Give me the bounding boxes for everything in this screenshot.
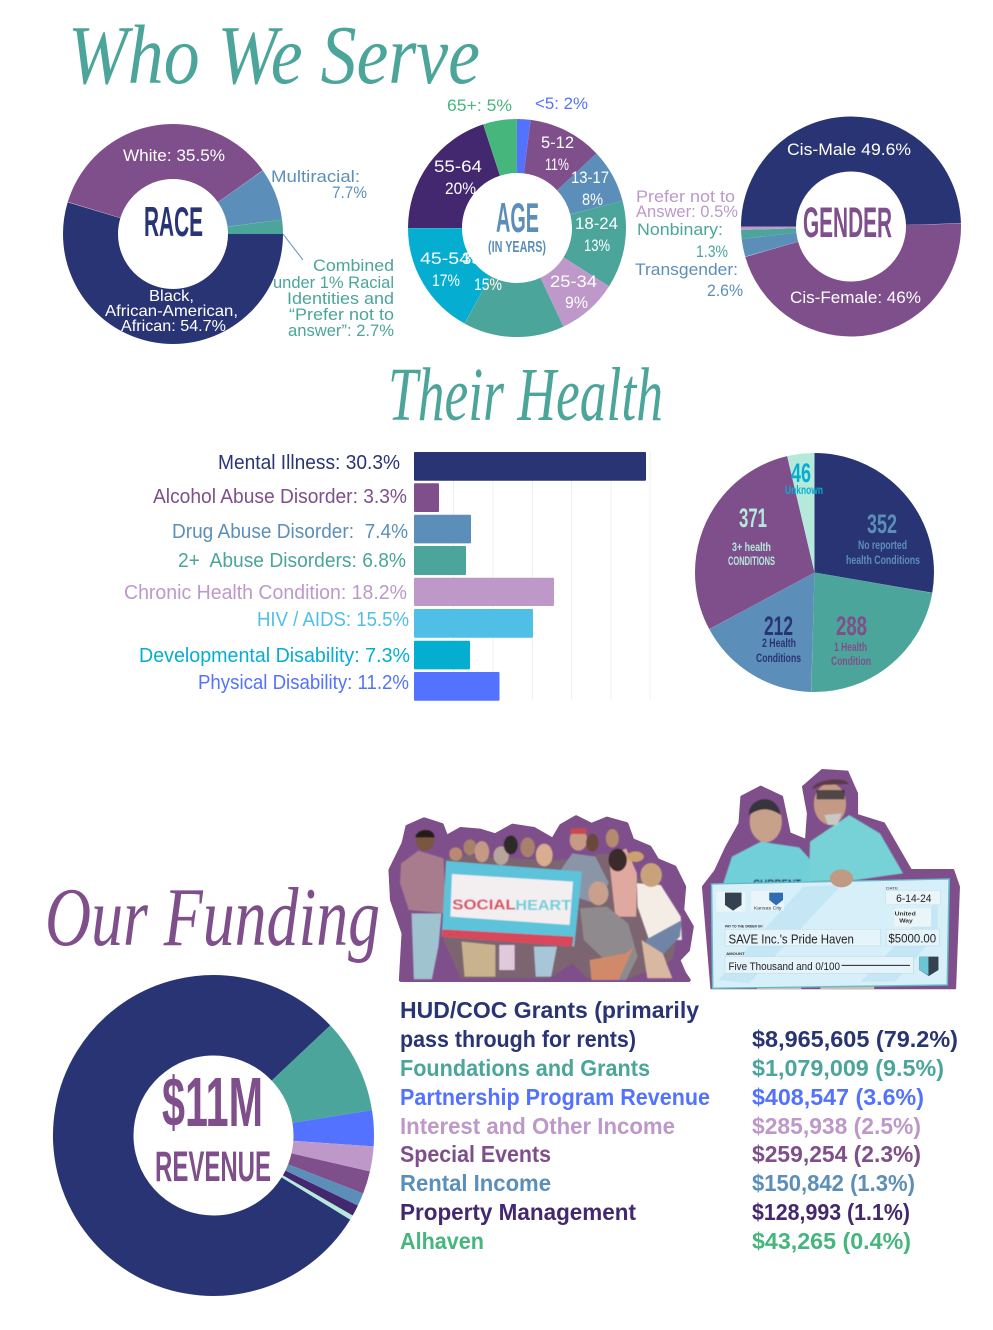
row: HUD/COC grants: [400, 997, 958, 1052]
gender outer labels: Prefer not to: [636, 187, 735, 206]
row: foundations and grants: [400, 1055, 944, 1081]
bar: HIV/AIDS: [414, 609, 533, 638]
pie label: 371: 3+ health: [732, 540, 771, 554]
age slice labels: 13%: [584, 236, 610, 255]
age slice labels: 35-44: [462, 249, 505, 268]
legs below check: [757, 983, 874, 989]
gender slice labels: [787, 140, 921, 307]
funding table: [400, 997, 958, 1254]
race label: black: Black,: [149, 288, 194, 305]
race label: combined: Identities and: [287, 289, 394, 308]
row: rental income: $150,842 (1.3%): [752, 1170, 915, 1196]
bar labels: Developmental Disability: 7.3%: [139, 645, 410, 667]
age outer labels: <5: 2%: [535, 94, 588, 113]
pie label: 212: 2 Health: [762, 636, 796, 650]
pie label: 212: Conditions: [756, 651, 801, 665]
photo: group with banner: [391, 817, 692, 980]
purple cutout backing: [391, 817, 692, 980]
people at right: [580, 863, 682, 980]
bar: physical disability: [414, 672, 500, 701]
age slice labels: 18-24: [575, 214, 618, 233]
check: Five Thousand and 0/100: [728, 960, 840, 973]
age slice labels: 45-54: [420, 249, 470, 268]
purple cutout backing: [703, 770, 959, 988]
check: [712, 879, 949, 988]
row: special events: Special Events: [400, 1141, 551, 1167]
age slice labels: 5-12: [541, 133, 574, 152]
row: property management: Property Management: [400, 1199, 636, 1225]
bar: alcohol abuse: [414, 483, 439, 512]
row: HUD/COC grants: pass through for rents): [400, 1026, 636, 1052]
bar: developmental disability: [414, 641, 470, 669]
right person's hand: [830, 869, 853, 887]
row: interest and other income: $285,938 (2.5%): [752, 1113, 921, 1139]
pie slices: [734, 492, 895, 653]
race label: multiracial: [271, 167, 367, 202]
row: partnership program revenue: $408,547 (3.6%): [752, 1084, 924, 1110]
pie label: 371: 371: [739, 503, 767, 533]
pie label: 212: [756, 611, 801, 665]
age slice labels: [420, 133, 618, 312]
row: foundations and grants: $1,079,009 (9.5%): [752, 1055, 944, 1081]
age slice labels: 8%: [582, 190, 603, 209]
legs: [462, 942, 557, 977]
check: Way: [899, 918, 913, 925]
check: DATE: [886, 886, 898, 891]
panel: race donut: RACE: [144, 198, 203, 245]
pie label: 46: [785, 458, 823, 497]
panel: race donut: [58, 119, 394, 349]
bar labels: Alcohol Abuse Disorder: 3.3%: [153, 486, 407, 508]
gender donut chart: [749, 125, 953, 328]
age center label: (IN YEARS): [488, 239, 546, 256]
photo subjects: [400, 828, 682, 980]
age slice labels: 11%: [545, 155, 569, 174]
bar labels: Drug Abuse Disorder: 7.4%: [172, 521, 408, 543]
age outer labels: [447, 94, 588, 115]
gender slice labels: Cis-Female: 46%: [790, 288, 921, 307]
banner: SOCIAL: [452, 897, 516, 913]
row: rental income: Rental Income: [400, 1170, 551, 1196]
bar labels: 2+ Abuse Disorders: 6.8%: [178, 550, 406, 572]
bar labels: Physical Disability: 11.2%: [198, 672, 409, 694]
gender outer labels: 1.3%: [696, 242, 728, 261]
panel: health conditions pie: [728, 458, 920, 668]
race label: combined: Combined: [313, 256, 394, 275]
panel: gender donut: GENDER: [803, 199, 892, 247]
row: HUD/COC grants: $8,965,605 (79.2%): [752, 1026, 958, 1052]
race label: multiracial: 7.7%: [332, 183, 367, 202]
banner: [442, 861, 582, 947]
pie label: 288: [831, 611, 871, 668]
banner: HEART: [515, 898, 571, 914]
race label: white: White: 35.5%: [123, 146, 225, 165]
check: SAVE Inc.'s Pride Haven: [728, 933, 854, 946]
bar: 2+ abuse disorders: [414, 546, 466, 575]
bar labels: HIV / AIDS: 15.5%: [257, 609, 409, 631]
left person: CURRENT: [753, 877, 802, 891]
row: property management: $128,993 (1.1%): [752, 1199, 910, 1225]
age outer labels: 65+: 5%: [447, 96, 512, 115]
gender slice labels: Cis-Male 49.6%: [787, 140, 911, 159]
check: PAY TO THE ORDER OF:: [725, 924, 764, 929]
row: alhaven: Alhaven: [400, 1228, 484, 1254]
right person: [809, 780, 903, 882]
check: 6-14-24: [896, 894, 932, 905]
pie label: 371: [728, 503, 775, 568]
heading: Our Funding: Our Funding: [45, 871, 380, 964]
age slice labels: 20%: [445, 179, 476, 198]
age slice labels: 25-34: [550, 272, 597, 291]
pie label: 212: 212: [764, 611, 793, 641]
race label: combined: [273, 256, 394, 340]
gender outer labels: 2.6%: [707, 281, 743, 300]
age slice labels: 15%: [474, 275, 502, 294]
bar: mental illness: [414, 452, 646, 481]
check: United: [895, 911, 916, 918]
row: property management: [400, 1199, 910, 1225]
pie label: 46: 46: [791, 458, 811, 488]
row: rental income: [400, 1170, 915, 1196]
check: $5000.00: [888, 932, 936, 945]
age center label: [488, 194, 546, 256]
pie label: 288: 288: [836, 611, 867, 641]
age donut chart: [401, 112, 633, 344]
check: Kansas City: [754, 906, 782, 912]
row: HUD/COC grants: HUD/COC Grants (primarily: [400, 997, 699, 1023]
pie label: 352: health Conditions: [846, 553, 920, 567]
heading: Their Health: Their Health: [388, 353, 663, 437]
pie label: 352: No reported: [858, 538, 907, 552]
bar labels: Chronic Health Condition: 18.2%: [124, 582, 407, 604]
panel: revenue donut: [44, 966, 383, 1305]
row: partnership program revenue: [400, 1084, 924, 1110]
bar: drug abuse: [414, 515, 471, 543]
row: alhaven: $43,265 (0.4%): [752, 1228, 911, 1254]
gender outer labels: Answer: 0.5%: [636, 202, 738, 221]
pie label: 352: [846, 509, 920, 567]
pie label: 46: Unknown: [785, 483, 823, 497]
bar labels: Mental Illness: 30.3%: [218, 452, 400, 474]
leader line: [283, 234, 303, 260]
row: interest and other income: [400, 1113, 921, 1139]
pie label: 288: 1 Health: [834, 640, 867, 654]
bar: chronic health: [414, 578, 554, 606]
photo: giant check presentation: [703, 770, 959, 989]
revenue center label: $11M: [162, 1063, 263, 1141]
age slice labels: 9%: [565, 293, 588, 312]
revenue donut chart: [44, 966, 383, 1305]
row: alhaven: [400, 1228, 911, 1254]
title: Who We Serve: Who We Serve: [68, 9, 480, 102]
panel: age donut: [401, 94, 633, 344]
age slice labels: 55-64: [434, 157, 482, 176]
background crowd: [443, 828, 680, 978]
gender outer labels: Transgender:: [635, 260, 738, 279]
race label: combined: answer”: 2.7%: [288, 321, 394, 340]
age slice labels: 13-17: [571, 168, 609, 187]
panel: health bar chart: [124, 452, 650, 701]
check: AMOUNT: [726, 951, 745, 956]
race label: combined: under 1% Racial: [273, 273, 394, 292]
row: interest and other income: Interest and Other Income: [400, 1113, 675, 1139]
race label: combined: “Prefer not to: [289, 305, 394, 324]
row: special events: [400, 1141, 921, 1167]
pie label: 288: Condition: [831, 654, 871, 668]
row: special events: $259,254 (2.3%): [752, 1141, 921, 1167]
pie label: 371: CONDITIONS: [728, 554, 775, 568]
row: partnership program revenue: Partnership Program Revenue: [400, 1084, 710, 1110]
bar labels: [124, 452, 410, 694]
race label: multiracial: Multiracial:: [271, 167, 360, 186]
panel: gender donut: [635, 125, 953, 328]
age slice labels: 17%: [432, 271, 460, 290]
gender outer labels: Nonbinary:: [637, 220, 723, 239]
age center label: AGE: [496, 194, 539, 241]
race donut chart: [58, 119, 288, 349]
gender outer labels: [635, 187, 743, 300]
pie label: 352: 352: [867, 509, 897, 539]
man at left: [400, 829, 446, 979]
row: foundations and grants: Foundations and Grants: [400, 1055, 650, 1081]
revenue center label: REVENUE: [155, 1143, 271, 1191]
race label: black: African-American,: [105, 303, 238, 320]
race label: black: African: 54.7%: [121, 318, 226, 335]
revenue center label: [155, 1063, 271, 1191]
race label: black: [105, 288, 238, 335]
left person: [723, 799, 812, 891]
